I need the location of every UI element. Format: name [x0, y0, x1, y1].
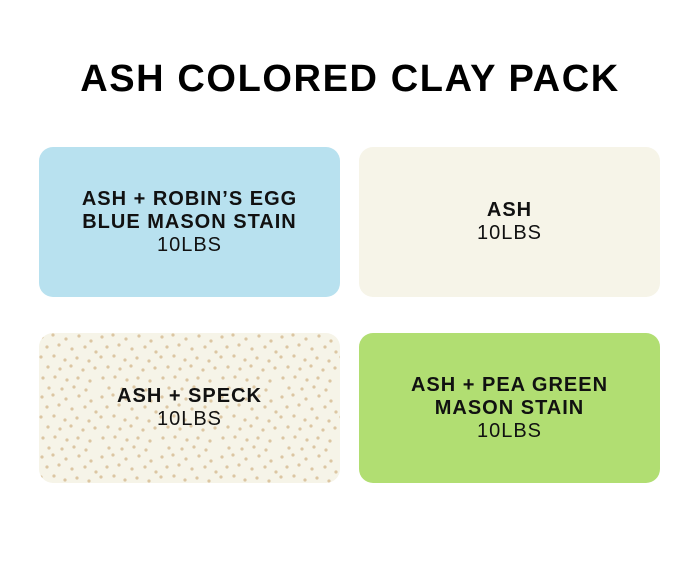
text: pea green label: 10LBS [477, 420, 542, 442]
panel: ash + speck [39, 333, 340, 483]
text: ash label: ASH [487, 199, 532, 221]
panel: ash + pea green [359, 333, 660, 483]
text: ash label [477, 199, 542, 244]
text: speck label [117, 385, 262, 430]
text: pea green label [411, 374, 608, 442]
text: pea green label: MASON STAIN [435, 396, 584, 418]
speck pattern [40, 333, 340, 483]
text: pea green label: ASH + PEA GREEN [411, 374, 608, 396]
text: robin's egg label: ASH + ROBIN’S EGG [82, 188, 297, 210]
title: ASH COLORED CLAY PACK [80, 58, 620, 100]
text: ash label: 10LBS [477, 222, 542, 244]
text: robin's egg label: BLUE MASON STAIN [82, 210, 297, 232]
panel: ash [359, 147, 660, 297]
text: robin's egg label: 10LBS [157, 234, 222, 256]
text: speck label: ASH + SPECK [117, 385, 262, 407]
panel: ash + robin's egg blue [39, 147, 340, 297]
text: speck label: 10LBS [157, 408, 222, 430]
text: robin's egg label [82, 188, 297, 256]
